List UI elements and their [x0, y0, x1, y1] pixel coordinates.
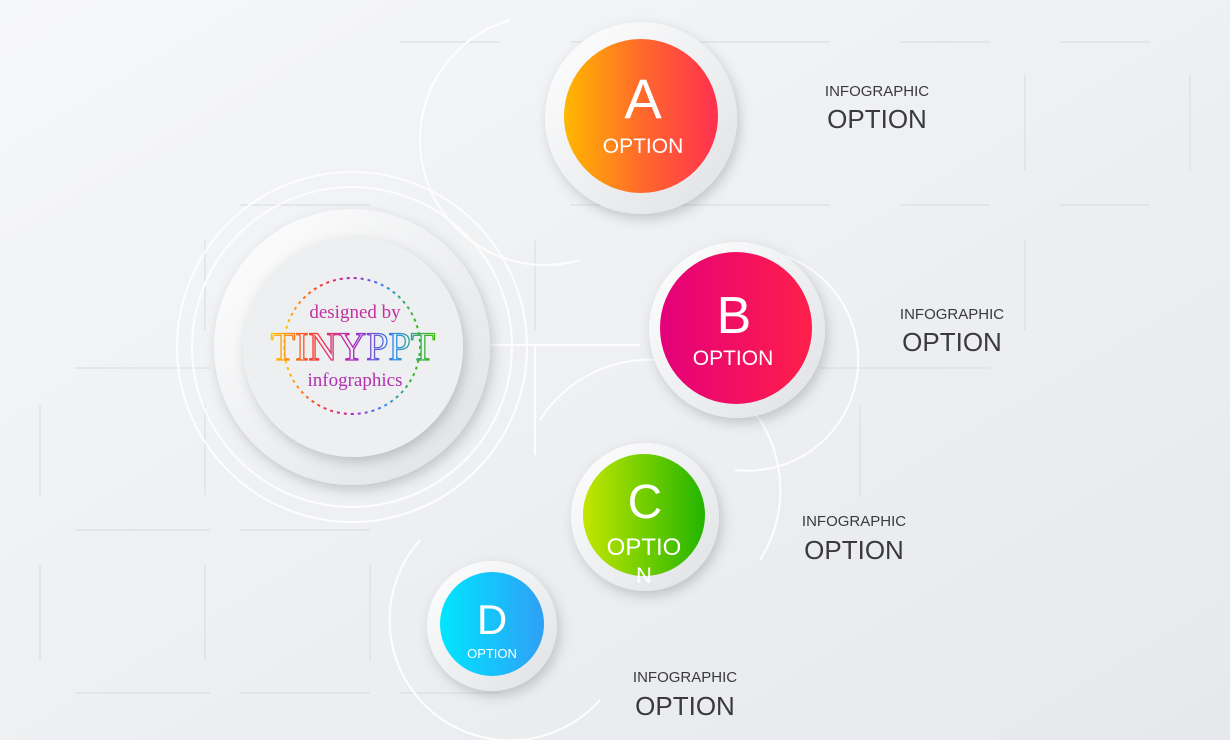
- label A: [825, 83, 929, 134]
- logo text: designed by: [309, 302, 401, 323]
- label B: INFOGRAPHIC: [900, 306, 1004, 323]
- option C circle: [571, 443, 719, 591]
- label D: [633, 669, 737, 721]
- center logo circle: [214, 209, 490, 485]
- label D: OPTION: [635, 691, 735, 721]
- option A circle: OPTION: [603, 135, 683, 158]
- option D circle: D: [477, 596, 507, 643]
- option B circle: [649, 242, 825, 418]
- option C circle: C: [628, 476, 662, 529]
- label A: INFOGRAPHIC: [825, 83, 929, 100]
- label B: OPTION: [902, 327, 1002, 357]
- option C circle: N: [636, 563, 652, 588]
- option A circle: [545, 22, 737, 214]
- option D circle: [427, 561, 557, 691]
- option B circle: B: [717, 287, 751, 345]
- option A circle: A: [624, 67, 662, 130]
- logo text: TINYPPT: [271, 324, 435, 369]
- label D: INFOGRAPHIC: [633, 669, 737, 686]
- label C: OPTION: [804, 535, 904, 565]
- logo dashed ring: [284, 278, 420, 414]
- label A: OPTION: [827, 104, 927, 134]
- option D circle: OPTION: [467, 646, 517, 661]
- label B: [900, 306, 1004, 357]
- option C circle: OPTIO: [607, 534, 681, 561]
- logo text: [271, 302, 435, 391]
- label C: [802, 513, 906, 565]
- option B circle: OPTION: [693, 347, 773, 370]
- logo text: infographics: [308, 370, 402, 391]
- label C: INFOGRAPHIC: [802, 513, 906, 530]
